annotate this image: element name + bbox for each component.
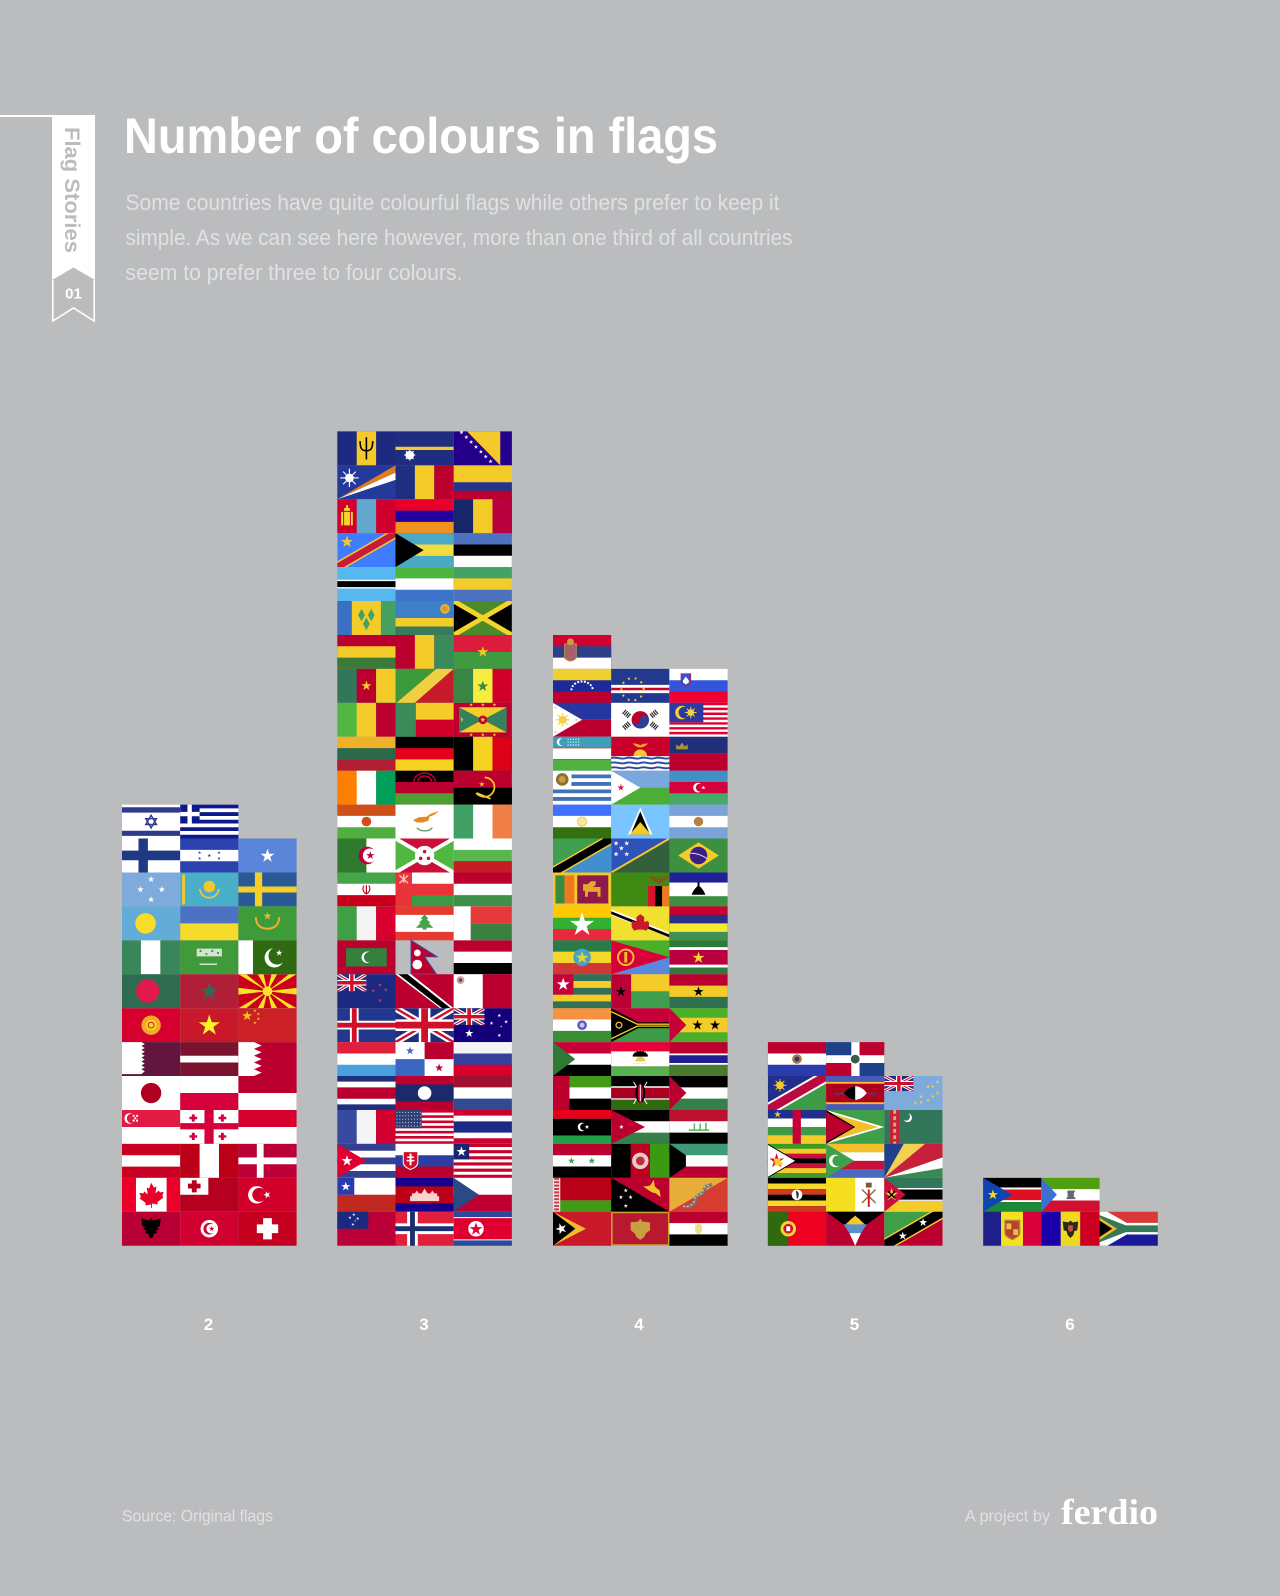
flag: Comoros bbox=[826, 1144, 884, 1178]
intro text bbox=[126, 190, 792, 285]
source note: Source: Original flags bbox=[122, 1506, 273, 1526]
flag: Barbados bbox=[337, 431, 396, 465]
flag: Hungary bbox=[454, 872, 512, 906]
flag: Australia bbox=[454, 1008, 512, 1042]
stack: flags with 4 colours bbox=[551, 635, 728, 1246]
flag: Iraq bbox=[669, 1110, 728, 1144]
flag: Samoa bbox=[337, 1212, 396, 1246]
flag: Tanzania bbox=[553, 838, 612, 872]
intro text: seem to prefer three to four colours. bbox=[126, 260, 462, 285]
flag: Lithuania bbox=[337, 737, 396, 771]
axis label: 5: 5 bbox=[850, 1315, 859, 1334]
flag: Solomon Islands bbox=[611, 839, 669, 872]
flag: Malta bbox=[454, 974, 512, 1008]
flag: South Korea bbox=[611, 703, 669, 737]
flag: Kazakhstan bbox=[180, 872, 238, 906]
flag: Guyana bbox=[826, 1110, 884, 1144]
flag: Uganda bbox=[768, 1178, 826, 1212]
flag: Guinea bbox=[396, 635, 454, 669]
flag: Philippines bbox=[553, 703, 611, 737]
flag: Kiribati bbox=[611, 737, 669, 771]
flag: Zimbabwe bbox=[768, 1144, 826, 1178]
flag: New Zealand bbox=[337, 974, 396, 1008]
flag: Estonia bbox=[454, 533, 512, 567]
flag: Serbia bbox=[553, 635, 611, 669]
flag: Palau bbox=[122, 906, 180, 940]
ribbon: Flag Stories 01: Flag Stories bbox=[60, 127, 83, 253]
flag: Malawi bbox=[396, 771, 454, 805]
flag: Seychelles bbox=[884, 1144, 942, 1178]
flag: Sao Tome and Principe bbox=[669, 1008, 728, 1042]
flag: Egypt bbox=[669, 1212, 728, 1246]
flag: Angola bbox=[454, 771, 512, 805]
flag: Mauritania bbox=[238, 906, 297, 940]
flag: Maldives bbox=[337, 940, 396, 974]
flag: Venezuela bbox=[553, 669, 611, 703]
flag: Grenada bbox=[454, 703, 512, 737]
flag: Vietnam bbox=[180, 1008, 238, 1042]
flag: Singapore bbox=[122, 1110, 180, 1144]
flag: France bbox=[337, 1110, 396, 1144]
flag: Bosnia bbox=[454, 430, 512, 465]
flag: South Africa bbox=[1100, 1212, 1158, 1246]
flag: Latvia bbox=[180, 1042, 238, 1076]
flag: Saudi Arabia bbox=[180, 940, 238, 974]
flag: Belarus bbox=[553, 1178, 611, 1212]
flag: Togo bbox=[553, 974, 611, 1008]
flag: Mali bbox=[337, 703, 396, 737]
flag: Lebanon bbox=[396, 906, 454, 940]
flag: Brunei bbox=[611, 906, 669, 940]
flag: Liberia bbox=[454, 1144, 512, 1178]
flag: Algeria bbox=[337, 839, 396, 872]
flag: Sweden bbox=[238, 872, 297, 906]
flag: Somalia bbox=[238, 839, 297, 872]
flag: Gabon bbox=[454, 567, 512, 601]
flag: Papua New Guinea bbox=[611, 1178, 669, 1212]
flag: Jordan bbox=[611, 1110, 669, 1144]
flag: Republic of the Congo bbox=[396, 669, 454, 703]
axis label: 6: 6 bbox=[1065, 1315, 1075, 1334]
flag: Oman bbox=[396, 872, 454, 906]
flag: Vatican City bbox=[826, 1178, 884, 1212]
stack: flags with 5 colours bbox=[766, 1042, 944, 1247]
flag: Turkey bbox=[238, 1178, 297, 1212]
flag: Montenegro bbox=[611, 1212, 669, 1246]
flag: Tajikistan bbox=[611, 1042, 669, 1076]
flag: Cuba bbox=[337, 1144, 396, 1178]
flag: Palestine bbox=[669, 1076, 728, 1110]
flag: Sri Lanka bbox=[553, 872, 611, 906]
flag: Panama bbox=[396, 1042, 454, 1076]
credit: A project by ferdio bbox=[965, 1492, 1158, 1532]
flag: Tonga bbox=[180, 1178, 238, 1212]
flag: Burundi bbox=[396, 839, 454, 872]
flag: Syria bbox=[553, 1144, 611, 1178]
flag: Bahamas bbox=[396, 533, 454, 567]
flag: Guinea-Bissau bbox=[611, 974, 669, 1008]
flag: Armenia bbox=[396, 499, 454, 533]
flag: Brazil bbox=[669, 839, 728, 872]
credit: A project by ferdio: A project by bbox=[965, 1506, 1050, 1526]
flag: Central African Republic bbox=[768, 1110, 826, 1144]
flag: Israel bbox=[122, 805, 180, 839]
flag: Burkina Faso bbox=[454, 635, 512, 669]
flag: Cape Verde bbox=[611, 669, 669, 703]
flag: Luxembourg bbox=[337, 1042, 396, 1076]
flag: Cambodia bbox=[396, 1178, 454, 1212]
flag: Equatorial Guinea bbox=[1041, 1178, 1100, 1212]
flag: Indonesia bbox=[238, 1076, 297, 1110]
flag: Gambia bbox=[669, 1042, 728, 1076]
flag: China bbox=[238, 1008, 297, 1042]
flag: Sudan bbox=[553, 1042, 611, 1076]
flag: Cyprus bbox=[396, 805, 454, 839]
flag: Albania bbox=[122, 1212, 180, 1246]
flag: Afghanistan bbox=[611, 1144, 669, 1178]
flag: Botswana bbox=[337, 567, 396, 601]
flag: Slovenia bbox=[669, 669, 728, 703]
flag: Liechtenstein bbox=[669, 737, 728, 771]
flag: Cameroon bbox=[337, 669, 396, 703]
flag: Mozambique bbox=[884, 1178, 942, 1212]
flag: Lesotho bbox=[669, 872, 728, 906]
flag: Sierra Leone bbox=[396, 567, 454, 601]
axis label: 4: 4 bbox=[634, 1315, 644, 1334]
flag: Uzbekistan bbox=[553, 737, 611, 771]
flag: Nauru bbox=[396, 431, 454, 465]
flag: Madagascar bbox=[454, 906, 512, 940]
flag: Portugal bbox=[768, 1212, 826, 1246]
flag: Ukraine bbox=[180, 906, 238, 940]
stack: flags with 2 colours bbox=[122, 805, 297, 1246]
flag: Poland bbox=[180, 1076, 238, 1110]
flag: Jamaica bbox=[454, 601, 512, 635]
flag: Peru bbox=[180, 1144, 238, 1178]
flag: Chile bbox=[337, 1178, 396, 1212]
flag: Eswatini bbox=[826, 1076, 884, 1110]
flag: Bangladesh bbox=[122, 974, 180, 1008]
flag: Azerbaijan bbox=[669, 771, 728, 805]
flag: Trinidad and Tobago bbox=[396, 974, 454, 1008]
flag: Belgium bbox=[454, 737, 512, 771]
flag: Dominican Republic bbox=[826, 1042, 884, 1076]
flag: Yemen bbox=[454, 940, 512, 974]
flag: Turkmenistan bbox=[884, 1110, 942, 1144]
flag: Pakistan bbox=[238, 940, 297, 974]
flag: Russia bbox=[454, 1042, 512, 1076]
flag: United Kingdom bbox=[396, 1008, 454, 1042]
flag: Uruguay bbox=[553, 771, 611, 805]
title: Number of colours in flags bbox=[124, 108, 718, 164]
flag: Saint Kitts and Nevis bbox=[882, 1211, 944, 1247]
intro text: Some countries have quite colourful flags while others prefer to keep it bbox=[126, 190, 780, 215]
ribbon: Flag Stories 01 bbox=[0, 115, 95, 321]
flag: Ivory Coast bbox=[337, 771, 396, 805]
flag: Djibouti bbox=[611, 771, 669, 805]
flag: Kyrgyzstan bbox=[122, 1008, 180, 1042]
flag: Switzerland bbox=[238, 1212, 297, 1246]
flag: Moldova bbox=[1041, 1212, 1100, 1246]
flag: Austria bbox=[122, 1144, 180, 1178]
flag: Nepal bbox=[396, 940, 454, 974]
flag: Costa Rica bbox=[337, 1076, 396, 1110]
flag: Suriname bbox=[669, 940, 728, 974]
flag: Ghana bbox=[669, 974, 728, 1008]
flag: Thailand bbox=[454, 1110, 512, 1144]
flag: Honduras bbox=[180, 839, 238, 872]
flag: Namibia bbox=[768, 1076, 826, 1110]
flag: Paraguay bbox=[768, 1042, 826, 1076]
flag: Senegal bbox=[454, 669, 512, 703]
flag: Kenya bbox=[611, 1076, 669, 1110]
flag: Qatar bbox=[122, 1042, 180, 1076]
flag: Canada bbox=[122, 1178, 180, 1212]
flag: Netherlands bbox=[454, 1076, 512, 1110]
flag: Tuvalu bbox=[884, 1076, 942, 1110]
flag: Zambia bbox=[611, 872, 669, 906]
axis label: 2: 2 bbox=[204, 1315, 213, 1334]
flag: Czech Republic bbox=[454, 1178, 512, 1212]
flag: Georgia bbox=[180, 1110, 238, 1144]
flag: Norway bbox=[396, 1212, 454, 1246]
flag: Greece bbox=[180, 805, 238, 839]
flag: Micronesia bbox=[122, 872, 180, 906]
flag: Timor-Leste bbox=[553, 1212, 611, 1246]
flag: North Korea bbox=[454, 1212, 512, 1246]
flag: Mongolia bbox=[337, 499, 396, 533]
flag: Colombia bbox=[454, 465, 512, 499]
flag: Vanuatu bbox=[611, 1008, 669, 1042]
flag: Andorra bbox=[983, 1212, 1041, 1246]
flag: Romania bbox=[454, 499, 512, 533]
flag: Finland bbox=[122, 839, 180, 872]
flag: Malaysia bbox=[669, 703, 728, 737]
flag: Denmark bbox=[238, 1144, 297, 1178]
flag: Mauritius bbox=[669, 906, 728, 940]
flag: Morocco bbox=[180, 974, 238, 1008]
flag: Monaco bbox=[238, 1110, 297, 1144]
flag: Ethiopia bbox=[553, 940, 611, 974]
flag: St Vincent bbox=[337, 601, 396, 635]
flag: Italy bbox=[337, 906, 396, 940]
flag: Bulgaria bbox=[454, 839, 512, 872]
flag: Benin bbox=[396, 703, 454, 737]
flag: Japan bbox=[122, 1076, 180, 1110]
flag: Tunisia bbox=[180, 1212, 238, 1246]
flag: Chad bbox=[396, 465, 454, 499]
flag: Myanmar bbox=[553, 906, 611, 940]
flag: Iran bbox=[337, 872, 396, 906]
flag: Libya bbox=[553, 1110, 611, 1144]
flag: Bhutan bbox=[669, 1178, 728, 1212]
flag: Antigua and Barbuda bbox=[826, 1212, 884, 1246]
flag: Marshall Islands bbox=[337, 465, 396, 499]
flag: India bbox=[553, 1008, 611, 1042]
credit: A project by ferdio: ferdio bbox=[1061, 1492, 1158, 1532]
flag: Bolivia bbox=[337, 635, 396, 669]
flag: North Macedonia bbox=[238, 974, 297, 1008]
flag: South Sudan bbox=[983, 1178, 1041, 1212]
flag: Laos bbox=[396, 1076, 454, 1110]
flag: Slovakia bbox=[396, 1144, 454, 1178]
flag: Eritrea bbox=[611, 940, 669, 974]
flag: Ireland bbox=[454, 805, 512, 839]
flag: Nigeria bbox=[122, 940, 180, 974]
intro text: simple. As we can see here however, more than one third of all countries bbox=[126, 225, 792, 250]
stack: flags with 6 colours bbox=[983, 1178, 1158, 1246]
flag: Argentina bbox=[669, 805, 728, 839]
flag: Nicaragua-style stripes bbox=[553, 805, 611, 839]
stack: flags with 3 colours bbox=[335, 430, 512, 1246]
flag: Germany bbox=[396, 737, 454, 771]
ribbon: Flag Stories 01: 01 bbox=[65, 286, 82, 302]
flag: Rwanda bbox=[396, 601, 454, 635]
flag: Bahrain bbox=[238, 1042, 297, 1076]
flag: Niger bbox=[337, 805, 396, 839]
flag: United States bbox=[396, 1110, 454, 1144]
flag: United Arab Emirates bbox=[553, 1076, 611, 1110]
flag: Saint Lucia bbox=[611, 805, 669, 839]
flag: Iceland bbox=[337, 1008, 396, 1042]
flag: Kuwait bbox=[669, 1144, 728, 1178]
axis label: 3: 3 bbox=[419, 1315, 429, 1334]
flag: DR Congo bbox=[335, 532, 397, 568]
